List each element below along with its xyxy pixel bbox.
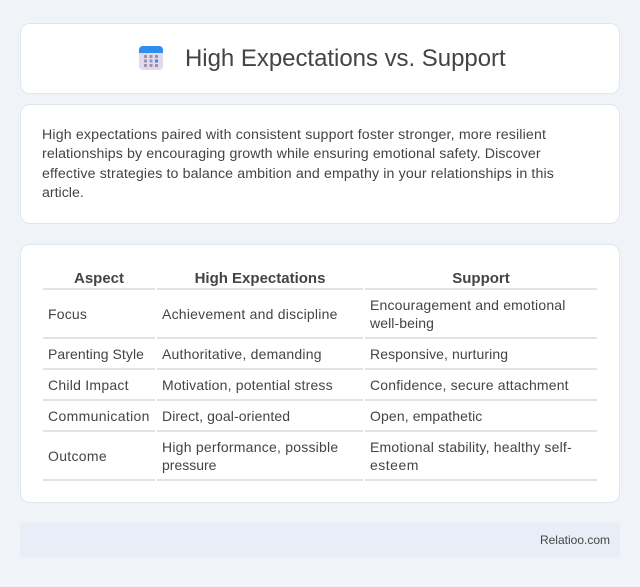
footer text: Relatioo.com [540,533,610,547]
column header: Aspect: Aspect [74,270,124,287]
row: Focus: Focus [48,306,87,322]
table card [20,244,620,503]
footer bar [20,523,620,557]
comparison table: Confidence, secure attachment [370,377,569,393]
row: Communication: Communication [48,408,150,424]
comparison table: pressure [162,457,216,473]
comparison table: Responsive, nurturing [370,346,508,362]
intro text: High expectations paired with consistent support foster stronger, more resilient [42,126,546,142]
column header: High Expectations: High Expectations [195,270,325,287]
intro text: article. [42,185,84,201]
comparison table: Motivation, potential stress [162,377,333,393]
icon: calendar [139,46,163,70]
row: Outcome: Outcome [48,448,107,464]
column header: Support: Support [452,270,510,287]
row: Parenting Style: Parenting Style [48,346,144,362]
comparison table: Achievement and discipline [162,306,338,322]
row: Child Impact: Child Impact [48,377,129,393]
comparison table: Authoritative, demanding [162,346,322,362]
intro text: effective strategies to balance ambition and empathy in your relationships in this [42,166,554,182]
title: High Expectations vs. Support [185,45,506,72]
comparison table: Direct, goal-oriented [162,408,290,424]
comparison table: esteem [370,457,419,473]
intro text [42,126,554,201]
comparison table: Encouragement and emotional [370,297,566,313]
intro card [20,104,620,224]
comparison table: Emotional stability, healthy self- [370,439,572,455]
comparison table: well-being [370,315,434,331]
intro text: relationships by encouraging growth while ensuring emotional safety. Discover [42,146,541,162]
comparison table: High performance, possible [162,439,338,455]
header card [20,23,620,94]
comparison table: Open, empathetic [370,408,482,424]
